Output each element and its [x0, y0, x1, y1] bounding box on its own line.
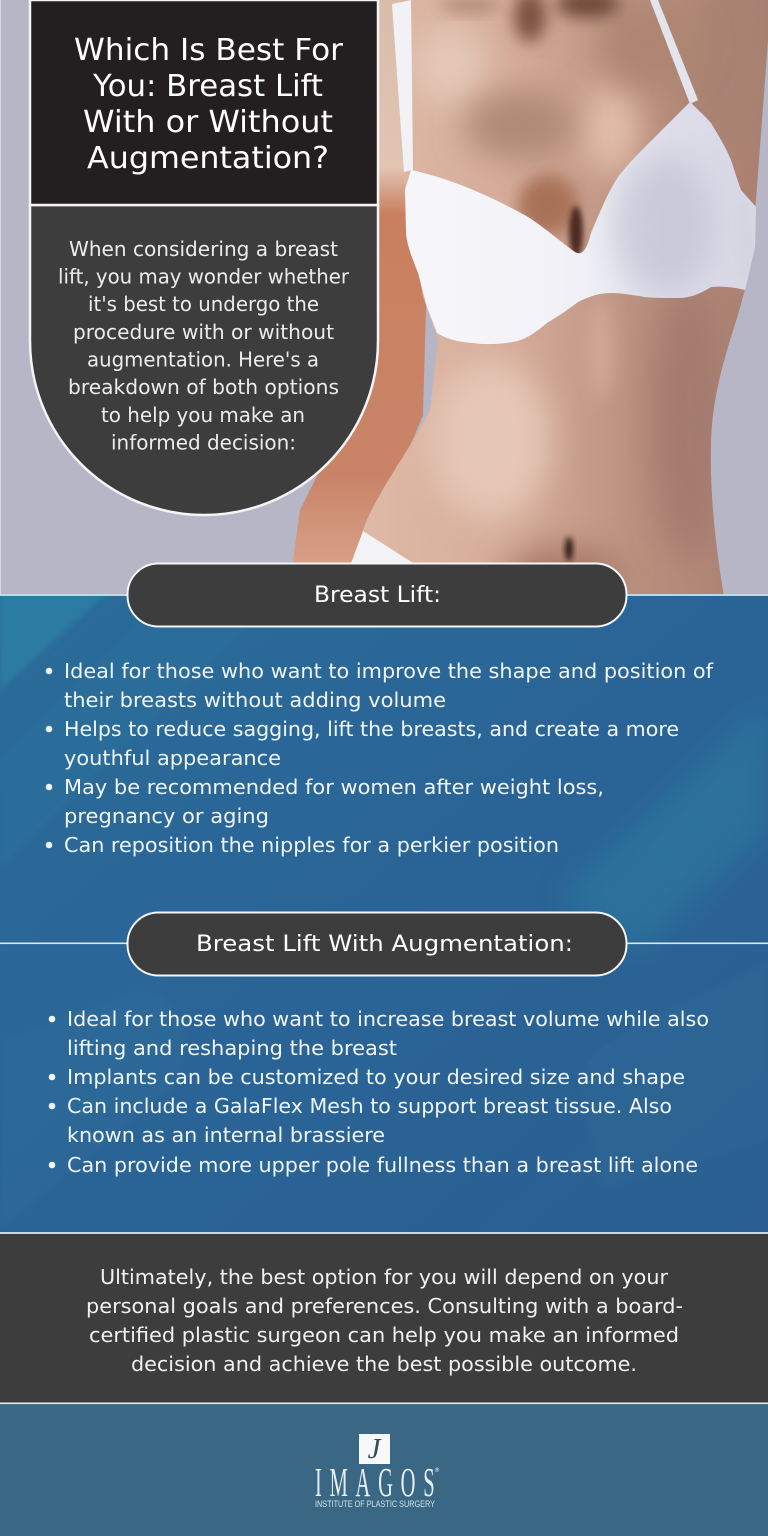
blue content section background	[0, 590, 768, 1233]
title panel: With or Without	[83, 105, 333, 140]
intro panel: When considering a breast	[69, 237, 338, 261]
skin shading	[412, 0, 768, 605]
intro panel: augmentation. Here's a	[87, 348, 319, 372]
bullet list: Breast Lift With Augmentation	[49, 1007, 709, 1177]
bullet list: Breast Lift With Augmentation: known as an internal brassiere	[67, 1123, 385, 1147]
intro panel: to help you make an	[101, 403, 305, 427]
bullet list: Breast Lift With Augmentation: lifting and reshaping the breast	[67, 1036, 397, 1060]
conclusion panel	[0, 1232, 768, 1404]
bullet list: Breast Lift With Augmentation: Can provide more upper pole fullness than a breast lift alone	[67, 1153, 698, 1177]
bullet list: Breast Lift	[46, 659, 714, 857]
title panel	[30, 0, 378, 205]
intro panel	[30, 205, 378, 515]
intro panel: lift, you may wonder whether	[58, 264, 350, 288]
bullet list: Breast Lift: their breasts without adding volume	[64, 688, 446, 712]
bullet list: Breast Lift With Augmentation: Can include a GalaFlex Mesh to support breast tissue. Also	[67, 1094, 672, 1118]
briefs	[350, 531, 413, 566]
left strap	[392, 0, 413, 172]
title panel: Augmentation?	[87, 141, 329, 176]
torso	[350, 0, 768, 596]
bullet list: Breast Lift: Helps to reduce sagging, lift the breasts, and create a more	[64, 717, 679, 741]
bra cups	[400, 95, 760, 355]
icon: navel	[565, 537, 573, 561]
logo wordmark: IMAGOS	[315, 1461, 442, 1506]
photo: torso in white bra	[288, 0, 768, 605]
right strap	[650, 0, 698, 104]
heading pill: Breast Lift With Augmentation: Breast Lift With Augmentation:	[196, 932, 573, 957]
title panel: Which Is Best For	[74, 33, 344, 68]
conclusion panel: Ultimately, the best option for you will depend on your	[100, 1265, 669, 1289]
photo background	[0, 0, 768, 596]
logo mark: J	[368, 1433, 382, 1465]
conclusion panel: decision and achieve the best possible outcome.	[131, 1352, 637, 1376]
bottom logo band background	[0, 1403, 768, 1536]
heading pill: Breast Lift: Breast Lift:	[314, 583, 441, 608]
bullet list: Breast Lift: youthful appearance	[64, 746, 281, 770]
bullet list: Breast Lift: May be recommended for women after weight loss,	[64, 775, 604, 799]
intro panel: it's best to undergo the	[88, 292, 319, 316]
heading pill: Breast Lift	[128, 564, 626, 626]
logo: Imagos Institute of Plastic Surgery	[315, 1433, 442, 1510]
bullet list: Breast Lift: Ideal for those who want to improve the shape and position of	[64, 659, 714, 683]
intro panel: breakdown of both options	[68, 375, 339, 399]
conclusion panel: personal goals and preferences. Consulting with a board-	[86, 1294, 683, 1318]
registered mark: ®	[434, 1467, 440, 1474]
arm	[288, 0, 427, 596]
bullet list: Breast Lift: Can reposition the nipples for a perkier position	[64, 833, 559, 857]
heading pill: Breast Lift With Augmentation	[128, 912, 626, 976]
bullet list: Breast Lift: pregnancy or aging	[64, 804, 269, 828]
bullet list: Breast Lift With Augmentation: Implants can be customized to your desired size and shape	[67, 1065, 685, 1089]
logo tagline: INSTITUTE OF PLASTIC SURGERY	[315, 1499, 435, 1510]
gap between arm and torso	[423, 306, 440, 414]
title panel: You: Breast Lift	[92, 69, 323, 104]
bullet list: Breast Lift With Augmentation: Ideal for those who want to increase breast volume while also	[67, 1007, 709, 1031]
divider line behind section 2 heading	[0, 942, 768, 944]
conclusion panel: certified plastic surgeon can help you make an informed	[89, 1323, 679, 1347]
intro panel: informed decision:	[111, 430, 296, 454]
intro panel: procedure with or without	[73, 320, 334, 344]
